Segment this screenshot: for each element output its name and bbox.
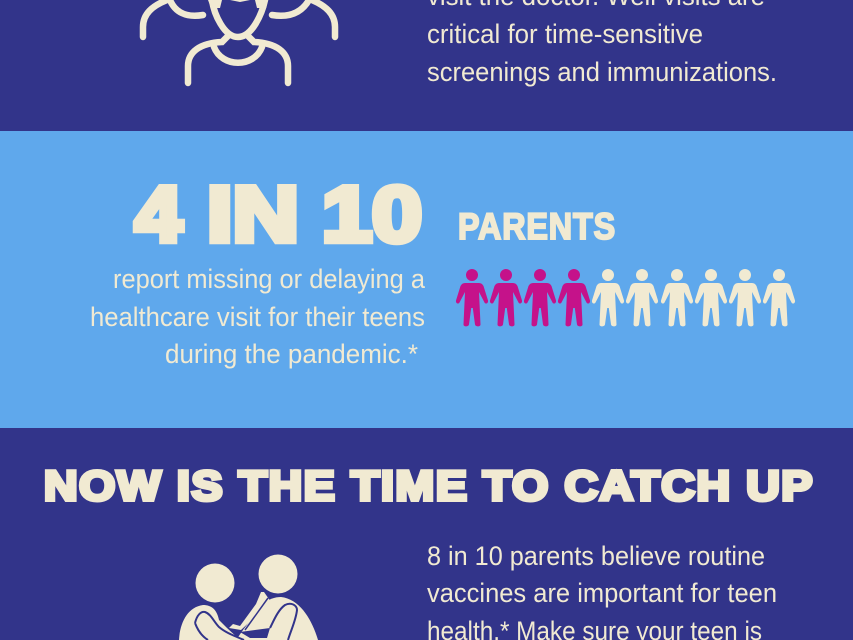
pictogram: 4 of 10 parents (456, 269, 795, 326)
bottom navy panel (0, 428, 853, 640)
text: well visits: critical for time-sensitive (427, 19, 703, 49)
text: catch up on vaccines: vaccines are important for teen (427, 578, 777, 608)
text: missing visits: healthcare visit for their teens (90, 302, 425, 332)
blue statistics panel (0, 131, 853, 428)
heading: parents: PARENTS (458, 206, 616, 247)
text: missing visits: report missing or delaying a (113, 264, 425, 294)
text: missing visits: during the pandemic.* (165, 339, 418, 369)
heading: 4 in 10 (135, 170, 422, 258)
heading: 4 in 10: IN (207, 170, 299, 258)
text: missing visits (90, 264, 425, 369)
heading: 4 in 10: 4 (135, 170, 182, 258)
heading: 4 in 10: 10 (322, 170, 422, 258)
icon: group of three teens (143, 0, 335, 83)
heading: now is the time to catch up: NOW IS THE TIME TO CATCH UP (44, 462, 814, 509)
text: catch up on vaccines: 8 in 10 parents believe routine (427, 541, 765, 571)
text: well visits (427, 0, 777, 87)
icon: doctor examining a teen with stethoscope (179, 554, 318, 640)
top navy panel (0, 0, 853, 131)
text: catch up on vaccines (427, 541, 777, 640)
text: well visits: screenings and immunizations. (427, 57, 777, 87)
